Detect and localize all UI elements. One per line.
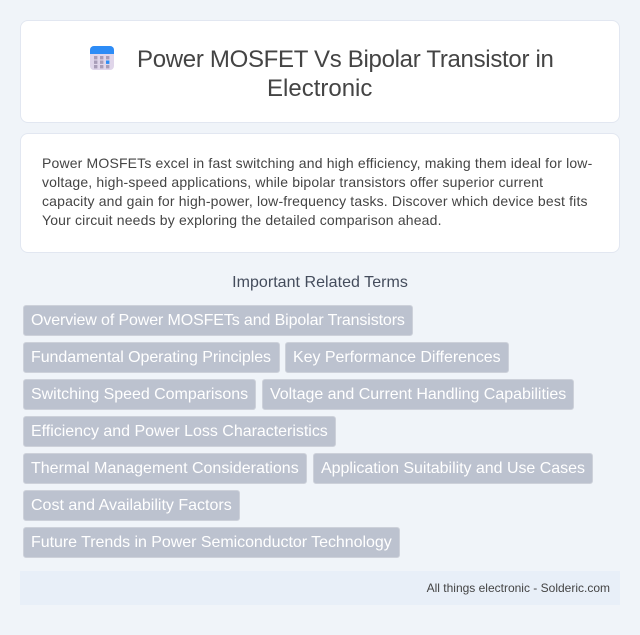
heading: related terms: Important Related Terms [232, 274, 408, 291]
tag: Efficiency and Power Loss Characteristics [31, 423, 328, 440]
tag [23, 305, 413, 336]
tag: Future Trends in Power Semiconductor Technology [31, 534, 392, 551]
panel: title card: Power MOSFET Vs Bipolar Transistor in [137, 46, 554, 73]
tag [23, 379, 256, 410]
title [137, 46, 554, 102]
panel: summary card [20, 133, 620, 253]
tag list: related terms [23, 305, 593, 558]
text block: summary: Power MOSFETs excel in fast switching and high efficiency, making them ideal for low- [42, 155, 592, 171]
tag [23, 453, 307, 484]
icon: calendar [90, 46, 114, 70]
tag: Voltage and Current Handling Capabilities [270, 386, 566, 403]
tag: Thermal Management Considerations [31, 460, 299, 477]
tag: Key Performance Differences [293, 349, 501, 366]
tag [23, 416, 336, 447]
tag [313, 453, 593, 484]
panel: title card [20, 20, 620, 123]
panel: title card: Electronic [267, 75, 372, 102]
text block: summary [42, 155, 592, 228]
tag: Overview of Power MOSFETs and Bipolar Transistors [31, 312, 405, 329]
tag: Application Suitability and Use Cases [321, 460, 585, 477]
tag: Switching Speed Comparisons [31, 386, 248, 403]
tag [23, 490, 240, 521]
text block: summary: capacity and gain for high-power, low-frequency tasks. Discover which device best fits [42, 193, 588, 209]
tag [23, 527, 400, 558]
tag [285, 342, 509, 373]
tag [23, 342, 280, 373]
footer: All things electronic - Solderic.com [427, 581, 610, 595]
footer [20, 571, 620, 605]
text block: summary: voltage, high-speed applications, while bipolar transistors offer superior current [42, 174, 543, 190]
tag: Cost and Availability Factors [31, 497, 232, 514]
text block: summary: Your circuit needs by exploring the detailed comparison ahead. [42, 212, 442, 228]
tag [262, 379, 574, 410]
tag: Fundamental Operating Principles [31, 349, 271, 366]
